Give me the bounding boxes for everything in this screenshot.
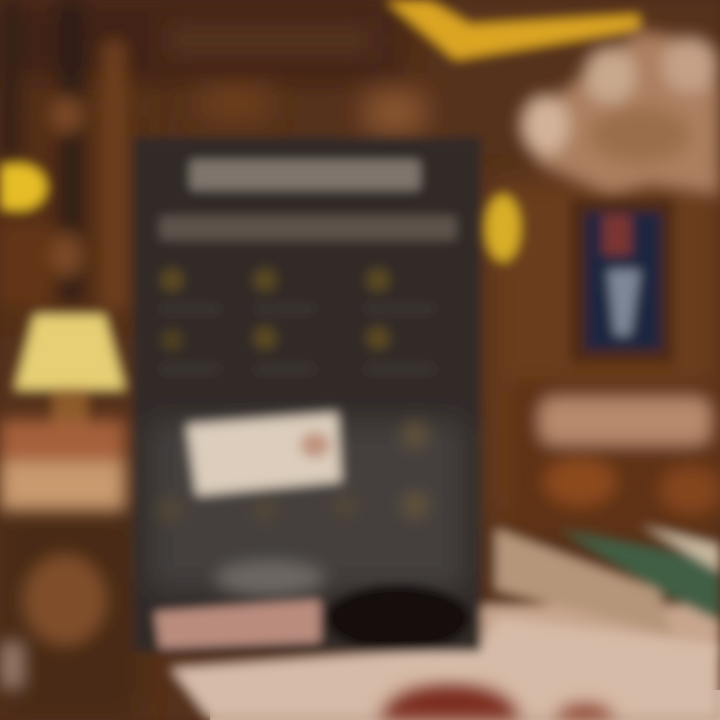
left table bbox=[0, 420, 125, 688]
lower icons bbox=[158, 422, 428, 522]
left yellow wall light bbox=[0, 163, 47, 211]
lower board texture bbox=[150, 420, 465, 590]
foreground white table bbox=[170, 618, 720, 720]
red objects on table bbox=[380, 684, 615, 720]
table base behind scene bbox=[210, 690, 720, 720]
icon grid bbox=[160, 268, 435, 373]
right yellow wall light bbox=[485, 194, 521, 262]
upper beam and lamp post bbox=[200, 85, 425, 135]
grey cloth above book bbox=[215, 560, 325, 596]
ceiling light strip bbox=[385, 0, 640, 60]
right side desk bbox=[510, 380, 720, 530]
white card bbox=[186, 412, 342, 496]
chandelier bbox=[520, 30, 720, 195]
left table lamp bbox=[14, 314, 126, 443]
framed blue picture bbox=[570, 198, 674, 363]
stack of books bbox=[480, 525, 720, 655]
poster subtitle bar bbox=[160, 216, 456, 240]
poster title bar bbox=[190, 160, 420, 190]
pink book at poster base bbox=[155, 600, 320, 648]
black object bbox=[326, 584, 470, 652]
left wooden shelves bbox=[0, 0, 126, 310]
chalkboard poster bbox=[133, 137, 481, 652]
poster board bbox=[133, 137, 481, 652]
